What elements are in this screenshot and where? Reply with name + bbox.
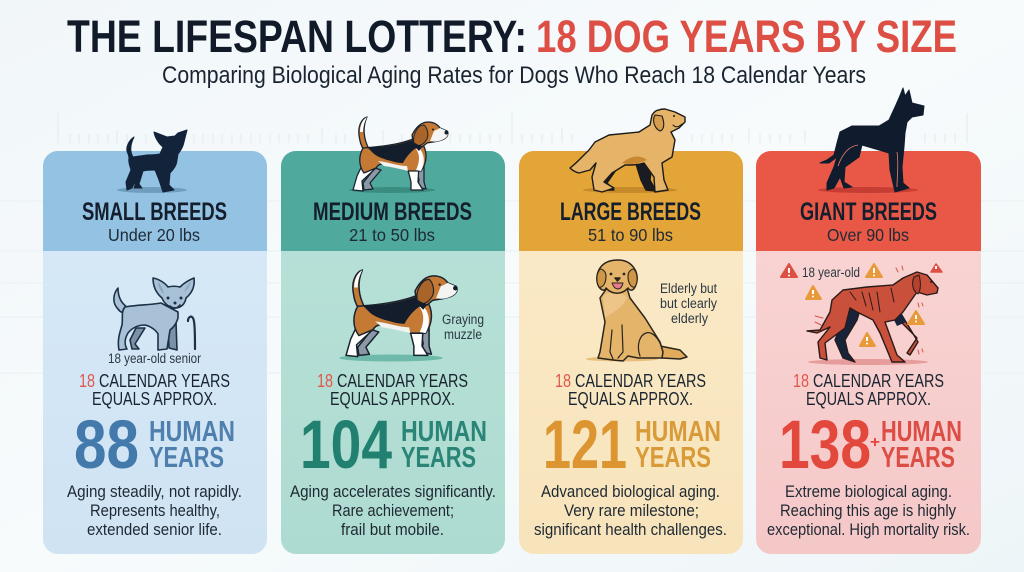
calendar years: small <box>79 370 230 409</box>
number: 121 human years: YEARS <box>635 442 711 474</box>
card header: giant <box>756 151 981 251</box>
description: small: extended senior life. <box>87 520 222 539</box>
description: medium: Rare achievement; <box>332 501 454 520</box>
weight: giant: Over 90 lbs <box>827 225 909 245</box>
description: giant: exceptional. High mortality risk. <box>767 520 970 539</box>
description: giant <box>767 482 970 539</box>
card body: medium <box>281 151 505 554</box>
heading: small breeds: SMALL BREEDS <box>82 198 227 226</box>
number: 138+ human years: YEARS <box>881 442 955 474</box>
card header: medium <box>281 151 505 251</box>
label: graying muzzle <box>442 312 484 342</box>
label: graying muzzle: muzzle <box>444 327 482 342</box>
panel: medium breeds <box>281 117 505 554</box>
icon: beagle standing <box>349 117 448 193</box>
heading: giant breeds: GIANT BREEDS <box>800 198 937 226</box>
calendar years: medium: EQUALS APPROX. <box>330 388 455 409</box>
label: elderly: Elderly but <box>660 281 717 296</box>
description: giant: Reaching this age is highly <box>780 501 956 520</box>
calendar years: medium <box>317 370 468 409</box>
number: 121 human years: 121 <box>543 406 627 483</box>
card header: large <box>519 151 743 251</box>
weight: medium: 21 to 50 lbs <box>349 225 435 245</box>
description: small <box>67 482 242 539</box>
icon: golden retriever standing <box>570 109 685 193</box>
description: large: Very rare milestone; <box>564 501 699 520</box>
title <box>67 11 957 62</box>
number: 88 human years: HUMAN <box>149 416 235 448</box>
illustration: frail giant dog <box>807 266 938 365</box>
illustration: senior chihuahua with cane <box>114 278 195 350</box>
label: 18 year-old: 18 year-old <box>802 265 860 280</box>
calendar years: large: 18 CALENDAR YEARS <box>555 370 706 391</box>
description: large: significant health challenges. <box>534 520 727 539</box>
description: large <box>534 482 727 539</box>
label: senior: 18 year-old senior <box>108 351 201 366</box>
calendar years: large <box>555 370 706 409</box>
panel: giant breeds <box>756 88 981 554</box>
icon: small dog silhouette <box>117 130 187 193</box>
calendar years: small: 18 CALENDAR YEARS <box>79 370 230 391</box>
icon: great dane silhouette <box>818 88 924 193</box>
card header: small <box>43 151 267 251</box>
calendar years: large: EQUALS APPROX. <box>568 388 693 409</box>
panel: large breeds <box>519 109 743 554</box>
number: 138+ human years <box>779 406 962 483</box>
calendar years: giant: 18 CALENDAR YEARS <box>793 370 944 391</box>
description: medium: frail but mobile. <box>341 520 444 539</box>
number: 88 human years: 88 <box>74 406 139 483</box>
label: elderly: but clearly <box>660 296 717 311</box>
number: 121 human years: HUMAN <box>635 416 721 448</box>
calendar years: giant <box>793 370 944 409</box>
illustration: graying beagle <box>339 270 458 362</box>
number: 138+ human years: 138 <box>779 406 871 483</box>
calendar years: medium: 18 CALENDAR YEARS <box>317 370 468 391</box>
heading: large breeds: LARGE BREEDS <box>560 198 701 226</box>
number: 88 human years: YEARS <box>149 442 224 474</box>
description: medium <box>290 482 496 539</box>
warning icons <box>781 264 942 346</box>
title: THE LIFESPAN LOTTERY: <box>67 11 527 62</box>
label: graying muzzle: Graying <box>442 312 484 327</box>
description: giant: Extreme biological aging. <box>785 482 952 501</box>
weight: large: 51 to 90 lbs <box>588 225 673 245</box>
description: small: Aging steadily, not rapidly. <box>67 482 242 501</box>
number: 104 human years <box>300 406 487 483</box>
number: 138+ human years: + <box>870 434 880 451</box>
label: elderly <box>660 281 717 326</box>
description: large: Advanced biological aging. <box>541 482 720 501</box>
number: 88 human years <box>74 406 235 483</box>
subtitle: Comparing Biological Aging Rates for Dogs Who Reach 18 Calendar Years <box>162 62 866 89</box>
illustration: golden retriever sitting <box>586 260 687 362</box>
panel: small breeds <box>43 130 267 554</box>
card body: small <box>43 151 267 554</box>
calendar years: small: EQUALS APPROX. <box>92 388 217 409</box>
card body: giant <box>756 151 981 554</box>
label: elderly: elderly <box>671 311 708 326</box>
description: small: Represents healthy, <box>90 501 220 520</box>
heading: medium breeds: MEDIUM BREEDS <box>313 198 472 226</box>
card body: large <box>519 151 743 554</box>
description: medium: Aging accelerates significantly. <box>290 482 496 501</box>
number: 104 human years: 104 <box>300 406 392 483</box>
number: 104 human years: YEARS <box>401 442 476 474</box>
number: 104 human years: HUMAN <box>401 416 487 448</box>
calendar years: giant: EQUALS APPROX. <box>806 388 931 409</box>
number: 121 human years <box>543 406 721 483</box>
number: 138+ human years: HUMAN <box>881 416 962 448</box>
weight: small: Under 20 lbs <box>108 225 200 245</box>
